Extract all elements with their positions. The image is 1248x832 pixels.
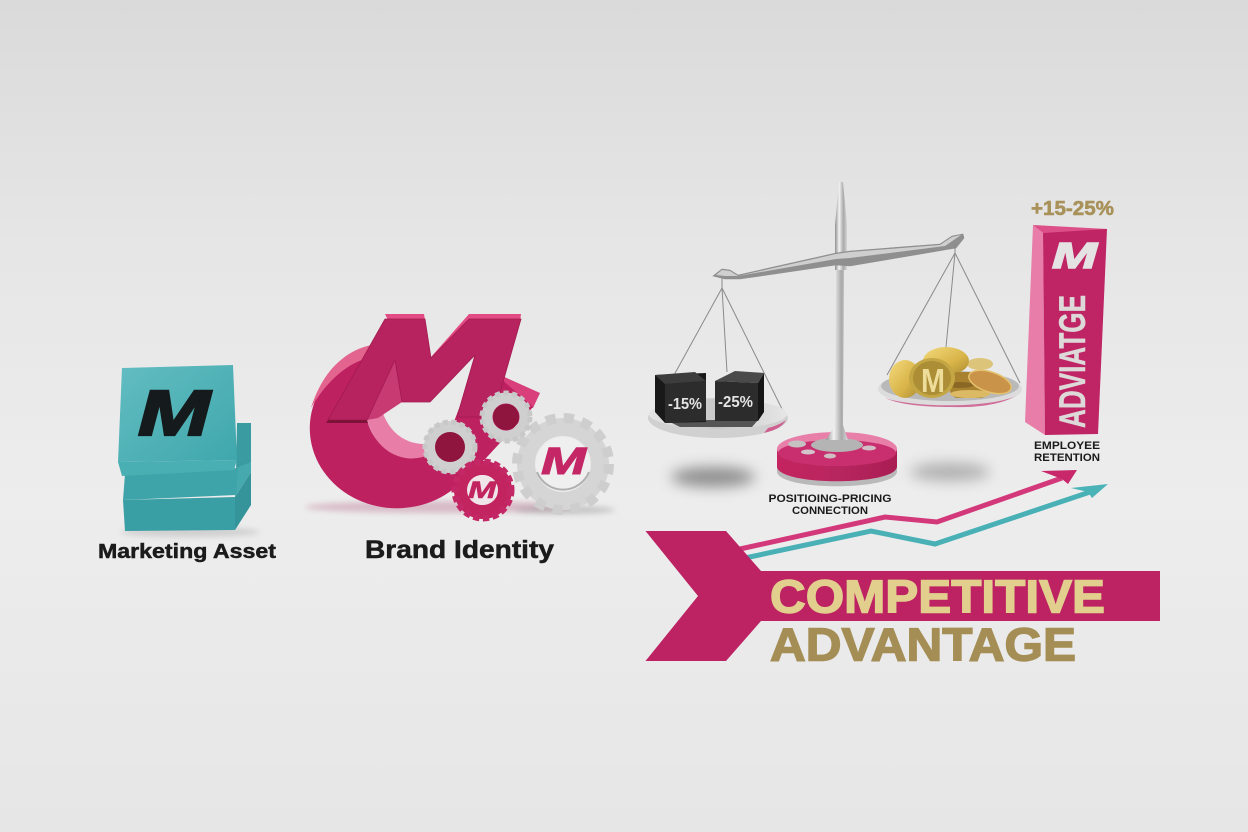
cube: -25% <box>715 371 764 421</box>
label: employee retention: EMPLOYEE <box>1034 440 1100 452</box>
label: positioning-pricing connection: POSITIOING-PRICING <box>768 493 892 505</box>
icon: M logo on teal block: M <box>138 377 212 449</box>
right pan strings <box>887 243 1020 383</box>
label: marketing asset: Marketing Asset <box>98 541 276 563</box>
label: positioning-pricing connection: CONNECTION <box>792 505 868 517</box>
label: employee retention <box>1034 440 1100 464</box>
gear: pink with M: M <box>468 477 497 504</box>
heading: competitive advantage: ADVANTAGE <box>770 618 1076 670</box>
cube: -25%: -25% <box>718 394 753 411</box>
gear: large silver: M <box>541 441 588 483</box>
left pan <box>648 398 788 438</box>
scale beam <box>713 234 964 279</box>
icon: gears <box>425 393 615 518</box>
gear: top silver <box>482 393 530 441</box>
banner: chevron arrow <box>646 531 1160 661</box>
label: employee retention: RETENTION <box>1034 452 1100 464</box>
left pan strings <box>652 278 785 415</box>
gear: pink with M <box>455 462 511 518</box>
icon: M on coin: M <box>921 362 945 399</box>
arrow: pink trend <box>740 470 1077 549</box>
label: brand identity: Brand Identity <box>365 536 554 564</box>
cube: -15% <box>655 372 706 423</box>
label: positioning-pricing connection <box>768 493 892 517</box>
bar: advantage column <box>1025 225 1107 435</box>
gear: left silver <box>425 422 475 472</box>
heading: competitive advantage: COMPETITIVE <box>770 570 1105 622</box>
bar text: ADVIATGE <box>1052 295 1093 428</box>
icon: gold coins <box>889 347 1014 399</box>
icon: balance scale <box>648 182 1022 487</box>
scale shadows <box>671 463 990 487</box>
heading: competitive advantage <box>770 570 1105 670</box>
cube: -15%: -15% <box>668 396 702 413</box>
arrow: teal trend <box>745 484 1108 558</box>
icon: M on bar: M <box>1052 235 1098 276</box>
icon: pink C and M brand mark <box>305 314 575 513</box>
scale post <box>826 268 848 440</box>
value: +15-25%: +15-25% <box>1031 198 1114 220</box>
gear: large silver <box>515 418 615 514</box>
scale base <box>777 432 897 486</box>
right pan <box>878 371 1022 407</box>
icon: teal stacked blocks <box>118 365 260 537</box>
